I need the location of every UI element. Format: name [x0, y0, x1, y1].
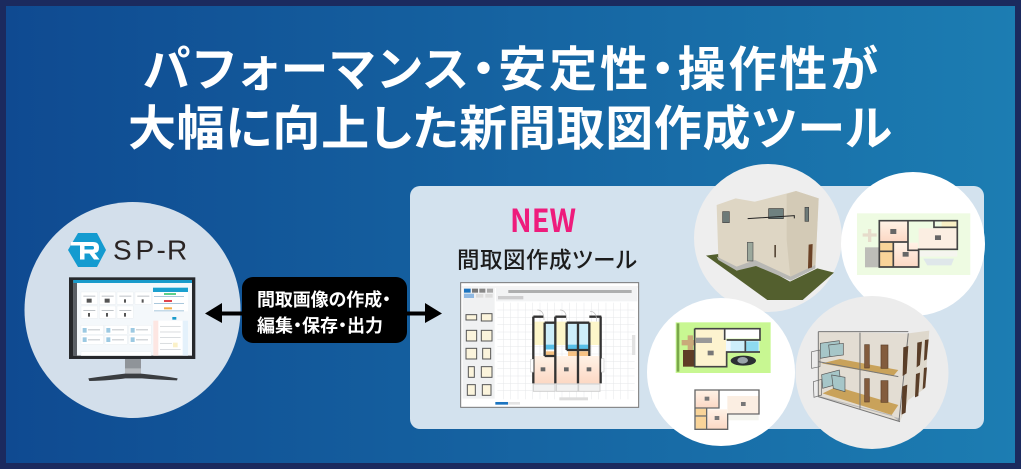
image: 3D exterior house [694, 164, 842, 312]
icon: SP-R logo: SP-R [113, 234, 187, 266]
callout: image functions: 間取画像の作成・ [257, 286, 391, 312]
notice panel and calendar [153, 287, 188, 311]
tool heading: 間取図作成ツール [457, 243, 637, 275]
icon: SP-R logo [68, 233, 187, 267]
callout: image functions: 編集・保存・出力 [257, 312, 383, 338]
floor plan [531, 310, 604, 391]
arrow: double-headed [205, 303, 442, 323]
image: floor plan 2 [647, 298, 795, 446]
panel: new tool [410, 186, 984, 429]
title: 大幅に向上した新間取図作成ツール [128, 89, 892, 159]
dashboard cards [81, 292, 151, 356]
NEW label: NEW [510, 196, 576, 242]
upper floor [696, 391, 718, 408]
monitor with dashboard screenshot [69, 277, 195, 381]
title: パフォーマンス・安定性・操作性が [143, 30, 878, 100]
image: floor plan 1 [841, 172, 985, 316]
editor screenshot [461, 283, 639, 407]
title [128, 30, 892, 159]
callout: image functions [242, 277, 407, 343]
editor canvas grid [497, 303, 635, 399]
panel: SP-R circle [24, 202, 240, 418]
image: 3D building cutaway [796, 296, 948, 449]
